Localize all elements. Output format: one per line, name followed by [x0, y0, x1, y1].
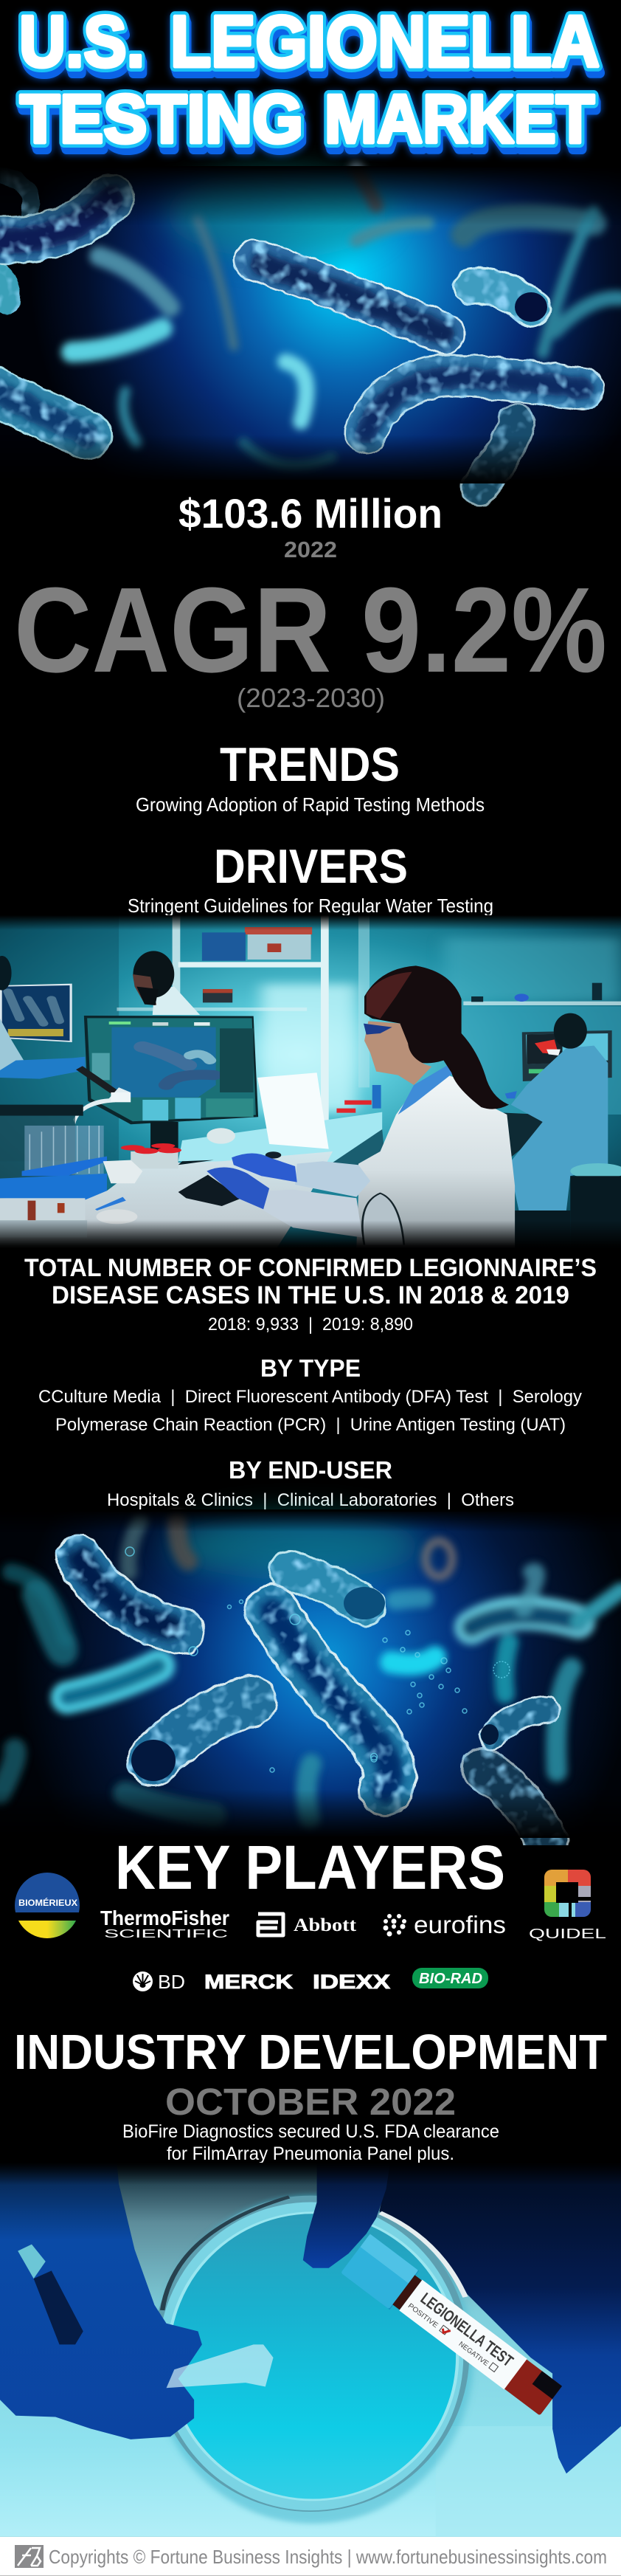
logo: Bio-Rad: BIO-RAD: [419, 1971, 482, 1987]
footer: [0, 2537, 621, 2576]
development date: OCTOBER 2022: [165, 2081, 456, 2123]
CAGR period: (2023-2030): [237, 683, 385, 713]
development text: [122, 2121, 499, 2164]
shelving: [117, 915, 621, 1149]
cases heading: [24, 1254, 597, 1309]
cases heading line 2: DISEASE CASES IN THE U.S. IN 2018 & 2019: [52, 1281, 569, 1309]
test tube: POSITIVE: [406, 2302, 440, 2329]
title line 1: U.S.: U.S.: [19, 1, 145, 82]
bacterium: far left curl: [0, 175, 32, 214]
title: [19, 1, 600, 157]
logo: eurofins: eurofins: [414, 1911, 506, 1938]
development text line 1: BioFire Diagnostics secured U.S. FDA clearance: [122, 2121, 499, 2142]
image: laboratory scene: [0, 915, 621, 1247]
small vial: [167, 2344, 274, 2388]
hair: [364, 965, 509, 1109]
logo: bioMerieux: [15, 1873, 80, 1938]
test tube: [341, 2234, 566, 2420]
main desk: [0, 1151, 333, 1247]
bearded man: [153, 987, 200, 1015]
title line 2: TESTING: TESTING: [20, 80, 303, 157]
left gloved hand: [0, 2163, 202, 2439]
by type line 2: Polymerase Chain Reaction (PCR) | Urine Antigen Testing (UAT): [55, 1415, 566, 1435]
image: bacteria close-up: [0, 1509, 621, 1842]
bacterium: centre long: [271, 1611, 389, 1790]
right person: [489, 1013, 621, 1247]
bacterium: lower left: [153, 1701, 251, 1760]
by end-user list: Hospitals & Clinics | Clinical Laboratories | Others: [107, 1490, 514, 1510]
logo: Abbott: Abbott: [294, 1915, 357, 1935]
drivers heading: DRIVERS: [214, 839, 408, 893]
bacterium: upper left: [80, 1559, 181, 1631]
logo: Thermo Fisher: ThermoFisher: [100, 1907, 229, 1929]
bacterium: lower right dim: [483, 1769, 547, 1842]
logo: Quidel: [529, 1870, 606, 1941]
left monitor: [0, 984, 72, 1042]
key players heading: KEY PLAYERS: [115, 1833, 505, 1902]
bacterium: top centre: [289, 1571, 366, 1606]
keyboard: [178, 1175, 242, 1206]
title line 2: TESTING: TESTING: [20, 80, 303, 157]
sleeves: [295, 1161, 370, 1197]
test tube: LEGIONELLA TEST: [417, 2289, 517, 2371]
logo: Thermo Fisher: [100, 1907, 229, 1940]
petri dish: [153, 2194, 473, 2524]
left person: [0, 1019, 24, 1075]
rear desk: [178, 1112, 382, 1164]
right shelf bottles: [471, 983, 602, 1002]
scientist: [178, 965, 515, 1247]
gloves: [232, 1153, 297, 1182]
cases heading line 1: TOTAL NUMBER OF CONFIRMED LEGIONNAIRE’S: [24, 1254, 597, 1282]
by end-user heading: BY END-USER: [229, 1456, 392, 1484]
bacterium: small right: [493, 1710, 547, 1736]
development text line 2: for FilmArray Pneumonia Panel plus.: [167, 2143, 454, 2164]
footer logo: [15, 2545, 44, 2568]
test tube: NEGATIVE: [457, 2340, 490, 2368]
by type line 1: CCulture Media | Direct Fluorescent Antibody (DFA) Test | Serology: [38, 1387, 582, 1407]
red capped containers: [121, 1143, 181, 1168]
trends text: Growing Adoption of Rapid Testing Methods: [136, 793, 485, 816]
logo: BD: [133, 1971, 185, 1993]
logo: Merck: MERCK: [204, 1971, 294, 1993]
logo: bioMerieux: BIOMÉRIEUX: [18, 1897, 77, 1908]
face: [364, 1021, 431, 1085]
logo: Quidel: QUIDEL: [529, 1926, 606, 1941]
cases figures: 2018: 9,933 | 2019: 8,890: [208, 1315, 413, 1335]
logo: Thermo Fisher: SCIENTIFIC: [104, 1928, 228, 1940]
logo: IDEXX: IDEXX: [313, 1971, 390, 1993]
main monitor: [84, 1016, 258, 1157]
drivers text: Stringent Guidelines for Regular Water Testing: [128, 895, 493, 917]
microscope: [79, 1068, 115, 1092]
image: bacteria hero: [0, 166, 621, 487]
logo: Bio-Rad: [412, 1968, 488, 1988]
title line 2: MARKET: MARKET: [325, 80, 594, 157]
by type heading: BY TYPE: [260, 1354, 361, 1382]
title line 1: U.S.: U.S.: [19, 1, 145, 82]
image: petri dish and test tube: [0, 2163, 621, 2537]
market size year: 2022: [284, 537, 337, 562]
by type list: [38, 1387, 582, 1435]
right gloved hand: [379, 2163, 621, 2473]
trends heading: TRENDS: [220, 737, 400, 791]
logo: Abbott: [258, 1914, 357, 1935]
title line 2: MARKET: MARKET: [325, 80, 594, 157]
pipettes: [257, 1072, 329, 1149]
market size value: $103.6 Million: [178, 490, 443, 537]
tubes and racks: [0, 1126, 107, 1238]
logo: BD: BD: [158, 1971, 185, 1993]
